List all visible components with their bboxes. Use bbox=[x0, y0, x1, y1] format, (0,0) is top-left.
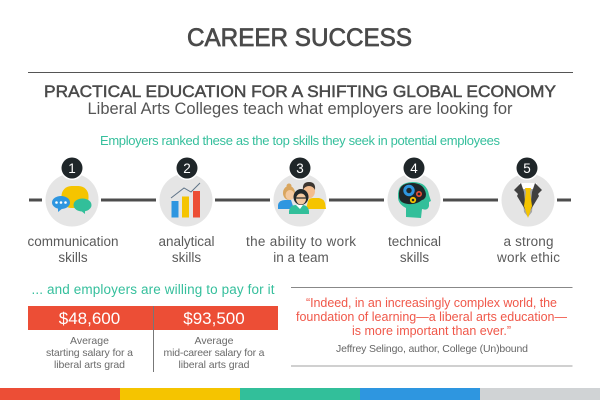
icon: bar chart with trend line bbox=[171, 183, 200, 218]
skill 3: teamwork bbox=[246, 156, 356, 265]
quote text: is more important than ever.” bbox=[352, 324, 511, 338]
mid-career salary caption: mid-career salary for a bbox=[164, 347, 265, 359]
subheading: Liberal Arts Colleges teach what employers are looking for bbox=[88, 100, 513, 118]
mid-career salary caption: liberal arts grad bbox=[178, 359, 250, 371]
skill 2: analytical: skills bbox=[172, 250, 201, 265]
skill 1: communication: skills bbox=[58, 250, 88, 265]
quote text bbox=[296, 296, 568, 338]
skill label: technical bbox=[388, 234, 441, 249]
skill 2: analytical bbox=[158, 156, 214, 265]
quote attribution: Jeffrey Selingo, author, College (Un)bound bbox=[336, 343, 528, 355]
rank badge 4: 4 bbox=[410, 161, 418, 176]
skill 5: work ethic: work ethic bbox=[496, 250, 560, 265]
icon: three people bbox=[278, 182, 326, 214]
skill label: analytical bbox=[158, 234, 214, 249]
rank badge 3: 3 bbox=[296, 161, 304, 176]
starting salary value: $48,600 bbox=[59, 309, 120, 328]
quote text: foundation of learning—a liberal arts education— bbox=[296, 310, 568, 324]
mid-career salary value: $93,500 bbox=[183, 309, 245, 328]
mid-career salary caption bbox=[164, 335, 265, 371]
skills connector line bbox=[29, 198, 571, 202]
icon: speech bubbles bbox=[52, 186, 92, 214]
quote text: “Indeed, in an increasingly complex world, the bbox=[306, 296, 557, 310]
starting salary caption: Average bbox=[70, 335, 109, 347]
panel: quote bbox=[291, 288, 572, 366]
salary heading: ... and employers are willing to pay for it bbox=[32, 282, 275, 297]
rank badge 1: 1 bbox=[68, 161, 76, 176]
skill 5: work ethic bbox=[496, 156, 560, 265]
skill 4: technical bbox=[388, 156, 441, 265]
starting salary caption: liberal arts grad bbox=[54, 359, 125, 371]
rank badge 5: 5 bbox=[523, 161, 531, 176]
skill 4: technical: skills bbox=[400, 250, 429, 265]
bottom colour band bbox=[0, 388, 600, 400]
skill 3: teamwork: in a team bbox=[273, 250, 329, 265]
skill label: a strong bbox=[504, 234, 554, 249]
starting salary caption bbox=[46, 335, 133, 371]
skill label: the ability to work bbox=[246, 234, 356, 249]
title: CAREER SUCCESS bbox=[187, 24, 412, 52]
starting salary caption: starting salary for a bbox=[46, 347, 133, 359]
skills intro text: Employers ranked these as the top skills they seek in potential employees bbox=[100, 133, 500, 148]
skill 1: communication bbox=[28, 156, 118, 265]
icon: suit and tie bbox=[514, 183, 542, 218]
heading: PRACTICAL EDUCATION FOR A SHIFTING GLOBAL ECONOMY bbox=[44, 82, 556, 101]
mid-career salary caption: Average bbox=[195, 335, 234, 347]
rank badge 2: 2 bbox=[183, 161, 191, 176]
icon: head with gears bbox=[398, 182, 431, 218]
skill label: communication bbox=[28, 234, 118, 249]
panel: salaries bbox=[28, 306, 278, 372]
